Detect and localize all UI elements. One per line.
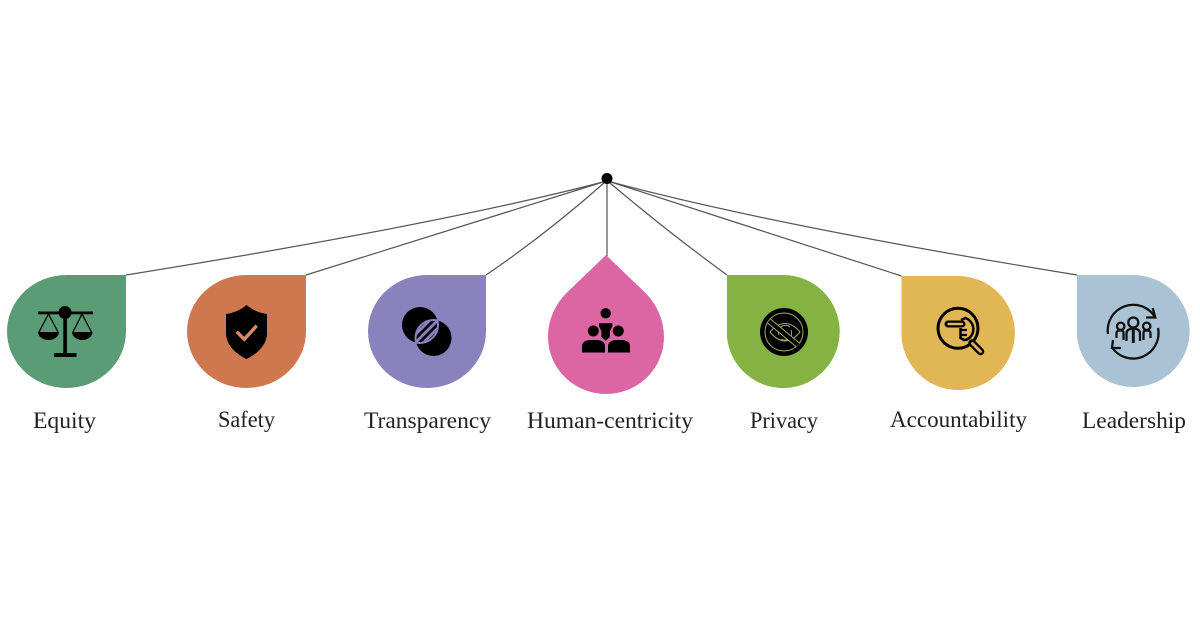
panel: Equity xyxy=(7,275,126,433)
panel: Leadership xyxy=(1077,275,1190,433)
drop shape: Leadership xyxy=(1077,275,1190,387)
label: Equity: Equity xyxy=(33,408,96,433)
panel: Privacy xyxy=(727,275,840,433)
icon: balance scales xyxy=(38,306,93,357)
panel: Transparency xyxy=(364,275,492,433)
icon: group of people xyxy=(582,308,630,352)
drop shape: Equity xyxy=(7,275,126,388)
central node xyxy=(602,173,612,184)
drop shape: Human-centricity xyxy=(548,255,664,394)
drop shape: Privacy xyxy=(727,275,840,388)
label: Privacy: Privacy xyxy=(750,408,818,433)
panel: Accountability xyxy=(890,276,1027,432)
icon: magnifier with pointing hand xyxy=(938,308,980,352)
diagram: seven principles hanging from a central node xyxy=(7,173,1190,433)
drop shape: Accountability xyxy=(902,276,1015,390)
icon: shield with check xyxy=(226,305,267,359)
drop shape: Safety xyxy=(187,275,306,388)
label: Human-centricity: Human-centricity xyxy=(527,408,694,433)
label: Safety: Safety xyxy=(218,407,275,432)
icon: crossed-out eye xyxy=(760,308,808,356)
label: Transparency: Transparency xyxy=(364,408,492,433)
icon: team with cycle arrows xyxy=(1108,305,1159,359)
icon: overlapping circles xyxy=(402,307,452,356)
panel: Human-centricity xyxy=(527,255,694,433)
connector lines xyxy=(126,179,1077,276)
drop shape: Transparency xyxy=(368,275,486,388)
label: Leadership: Leadership xyxy=(1082,408,1186,433)
label: Accountability: Accountability xyxy=(890,407,1027,432)
panel: Safety xyxy=(187,275,306,432)
